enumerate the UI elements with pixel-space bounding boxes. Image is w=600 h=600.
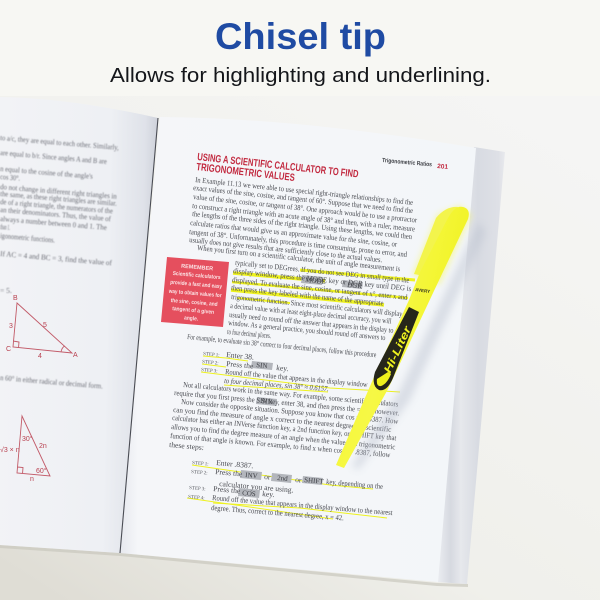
body text: value of the sine, cosine, or tangent of 38°. One approach would be to use a protractor [193,192,418,225]
body text: In Example 11.13 we were able to use special right-triangle relationships to find the [195,175,414,207]
triangle diagram 1: 4 [38,353,42,360]
marker yellow oval [377,372,391,386]
left page [0,97,158,553]
body text: window. As a general practice, you should round off answers to [228,318,386,342]
yellow highlights [187,270,415,519]
body text: to construct a right triangle with an acute angle of 38° and then, with a ruler, measure [192,201,416,233]
body text: SHIFT [304,476,325,486]
body text: degree. Thus, correct to the nearest degree, x = 42. [211,503,344,522]
triangle diagram 2: 60° [36,467,47,475]
body text: STEP 2: [191,470,208,476]
body text: MODE [305,276,326,286]
callout: remember: Scientific calculators [172,271,221,281]
left page text: do not change in different right triangles in [0,182,117,201]
body text: can you find the measure of angle x correct to the nearest degree? A scientific [173,405,392,434]
body text: displayed. To evaluate the sine, cosine, or tangent of x°, enter x and [232,275,408,302]
triangle diagram 2: n [30,476,34,483]
body text: or [295,475,302,485]
body text: SIN [256,361,268,370]
left page text: than 1. [0,222,11,232]
body text: a decimal value with at least eight-place decimal accuracy, you will [230,301,392,326]
page edges [437,147,505,584]
body text: these steps: [169,440,204,452]
callout: remember [161,257,229,327]
left page text: always a number between 0 and 1. The [0,214,108,232]
marker name: Hi-Liter [382,324,414,375]
left page text: igonometric functions. [0,231,55,245]
left page text: n 60° in either radical or decimal form. [0,373,103,391]
body text: Press the [213,484,241,495]
body text: STEP 3: [189,486,206,492]
body text: usually need to round off the answer that appears in the display to [229,310,394,335]
triangle diagram 1: 3 [9,323,13,330]
running head: Trigonometric Ratios [382,158,433,168]
section heading: TRIGONOMETRIC VALUES [196,161,295,184]
right page [120,117,476,582]
body text: Press the [226,359,254,371]
title: Chisel tip [215,15,386,57]
left page text: If AC = 4 and BC = 3, find the value of [0,249,113,267]
book [0,97,505,587]
triangle diagram 1: C [6,346,11,353]
book shadow [0,545,468,587]
body text: DGR [347,281,363,290]
left page text: are equal to b/r. Since angles A and B are [0,148,108,166]
triangle diagram 1: A [73,352,78,359]
triangle diagram 2 [0,416,50,483]
body text: 2nd [277,474,288,483]
body text: require that you first press the SIN key, enter 38, and then press the = key, however. [174,388,400,417]
left page text: = 5. [0,286,12,295]
body text: Round off the value that appears in the display window [225,367,368,389]
body text [169,175,418,522]
body text: or [264,472,271,482]
body text: key. [276,363,289,373]
left page text: de of a right triangle, the numerators of the [0,197,114,215]
callout: remember: angle. [184,315,199,323]
marker shadow [352,222,486,470]
body text: display window, press the MODE key or DGR key until DEG is [233,266,412,293]
body text: calculator has either an INVerse function key, a 2nd function key, or a SHIFT key that [172,413,397,442]
body text: exact values of the sine, cosine, and tangent of 60°. Suppose that we need to find the [193,183,414,215]
body text: INV [245,471,258,480]
left page text: an their denominators. Thus, the value of [0,205,112,223]
subtitle: Allows for highlighting and underlining. [110,65,491,87]
body text: calculate ratios that would give us an approximate value for the sine, cosine, or [190,218,398,249]
callout: remember: the sine, cosine, and [170,298,218,308]
callout: remember: REMEMBER [181,264,213,272]
triangle diagram 1 [6,295,78,360]
key buttons [238,275,363,498]
body text: COS [242,489,256,498]
left page text: the same, as these right triangles are similar. [0,189,117,208]
triangle diagram 2: 30° [22,435,33,443]
body text: Press the [215,467,243,478]
icon: yellow highlighter [336,205,486,470]
body text: to four decimal places, sin 38° ≈ 0.6157. [224,376,329,393]
body text: the lengths of the three sides of the right triangle. Using these lengths, we could then [192,209,413,241]
body text: When you first turn on a scientific calculator, the unit of angle measurement is [197,243,401,273]
body text: STEP 3: [201,368,218,375]
logo tag: AVERY [415,287,430,294]
triangle diagram 1: B [13,295,18,302]
marker glow [412,205,472,285]
body text: tangent of 38°. Unfortunately, this procedure is time consuming, prone to error, and [189,227,408,259]
body text: allows you to find the degree measure of an angle when the value of a trigonometric [171,422,396,451]
body text: usually does not give results that are sufficiently close to the actual values. [189,235,383,264]
body text: calculator you are using. [219,479,294,495]
marker clip [414,207,458,276]
left page text: to a/c, they are equal to each other. Similarly, [0,133,119,152]
body text: function of that angle is known. For example, to find x when cos x = .8387, follow [170,431,391,459]
body text: STEP 2: [202,360,219,367]
left page text: n equal to the cosine of the angle's [0,164,93,181]
body text: Not all calculators work in the same way. For example, some scientific calculators [183,380,399,409]
marker body [336,207,469,468]
triangle diagram 1: 5 [43,322,47,329]
body text: Round off the value that appears in the display window to the nearest [212,493,394,517]
body text: trigonometric function. Since most scientific calculators will display [231,292,403,318]
body text: key. [262,489,275,499]
body text: STEP 1: [192,461,209,467]
callout: remember: way to obtain values for [168,289,222,299]
body text: Enter .8387. [216,458,254,470]
body text: STEP 4: [188,495,205,501]
spine [120,118,158,553]
body text: key, depending on the [326,477,384,491]
body text: to four decimal places. [227,327,272,340]
body text: typically set to DEGrees. If you do not see DEG in small type in the [235,258,410,285]
triangle diagram 2: 2n [39,443,47,450]
callout: remember: provide a fast and easy [170,280,223,290]
body text: STEP 1: [203,352,220,359]
left page text [0,133,119,391]
section heading: USING A SCIENTIFIC CALCULATOR TO FIND [197,151,359,181]
triangle diagram 2: √3 × n [0,446,20,454]
body text: SIN [261,397,273,406]
callout: remember: tangent of a given [172,306,215,316]
section heading [196,151,359,184]
body text: then press the key labeled with the name of the appropriate [231,283,384,308]
left page text: cos 30°. [0,172,21,183]
body text: For example, to evaluate sin 38° correct to four decimal places, follow this procedure [187,332,377,359]
running head: 201 [437,163,449,171]
body text: Enter 38. [226,350,254,362]
body text: Now consider the opposite situation. Suppose you know that cos x = .8387. How [181,397,399,426]
marker label [374,307,419,390]
